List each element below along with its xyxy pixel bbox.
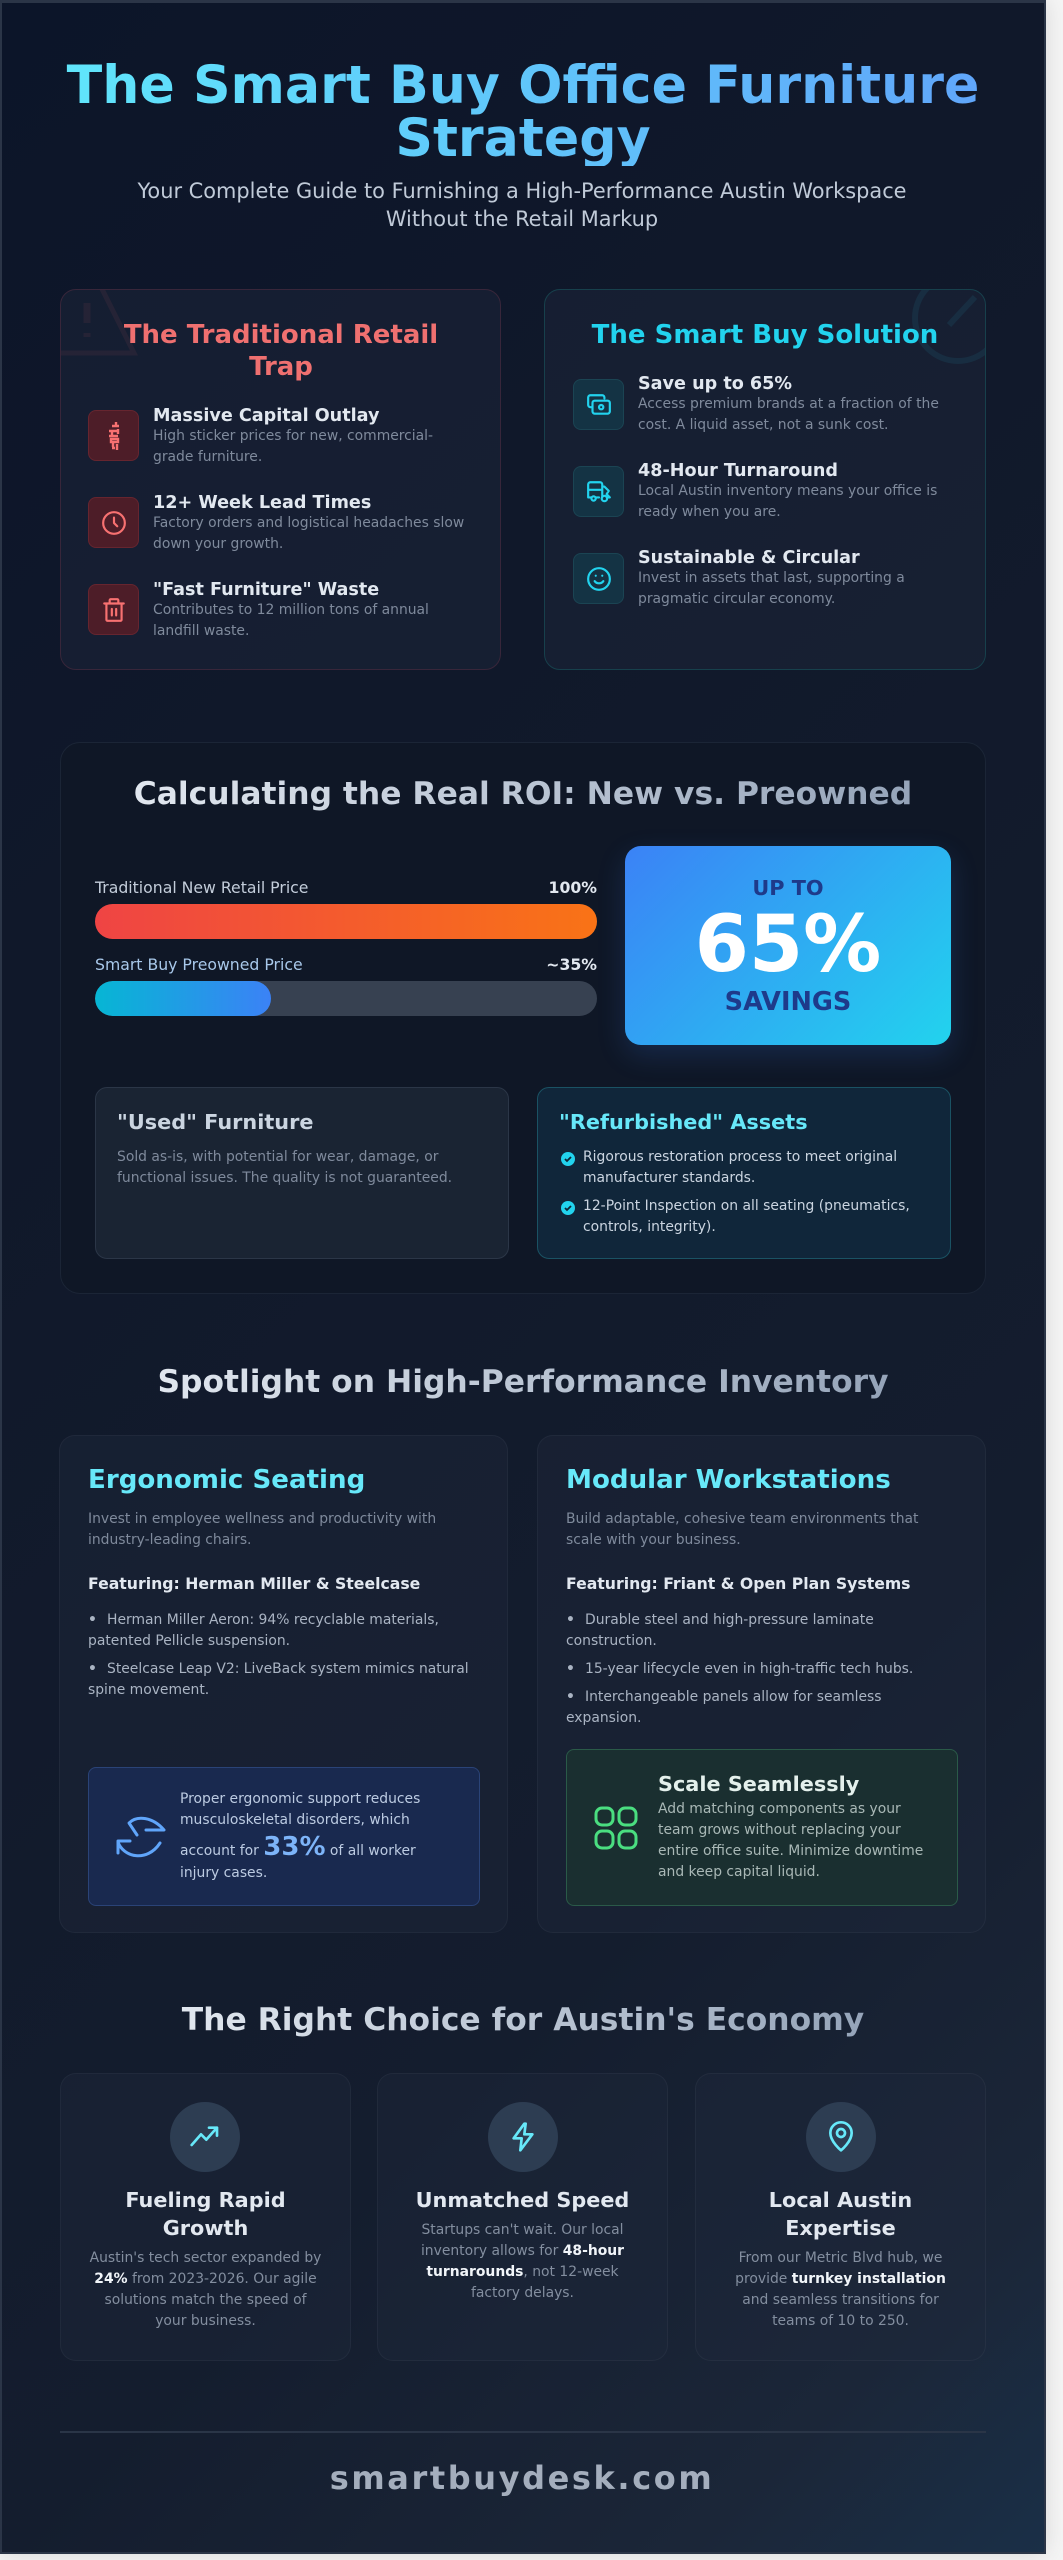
text: unmatched speed: turnarounds, not 12-week xyxy=(426,2264,619,2280)
text: statistic: injury cases. xyxy=(180,1865,267,1881)
text: massive capital outlay: High sticker prices for new, commercial- xyxy=(153,428,433,444)
icon: lightning bolt xyxy=(488,2102,558,2172)
text: intro: scale with your business. xyxy=(566,1532,741,1548)
text: unmatched speed: factory delays. xyxy=(471,2285,574,2301)
text: lead times: down your growth. xyxy=(153,536,283,552)
heading: traditional retail trap: The Traditional Retail xyxy=(124,320,438,350)
text: sustainable: Invest in assets that last, supporting a xyxy=(638,570,905,586)
footer: website: smartbuydesk.com xyxy=(330,2459,714,2497)
heading: fueling rapid growth: Growth xyxy=(163,2216,248,2240)
icon: clock xyxy=(88,497,139,548)
text: inspection: controls, integrity). xyxy=(583,1219,716,1235)
heading: ergonomic seating: Ergonomic Seating xyxy=(88,1465,365,1495)
text: intro xyxy=(88,1511,436,1548)
text: description xyxy=(658,1801,923,1880)
heading: unmatched speed: Unmatched Speed xyxy=(416,2188,629,2212)
icon: trending up xyxy=(170,2102,240,2172)
text: restoration: Rigorous restoration process to meet original xyxy=(583,1149,897,1165)
text: sustainable: Sustainable & Circular xyxy=(638,548,860,568)
panel: refurbished assets xyxy=(537,1087,951,1259)
text: fast furniture waste: Contributes to 12 million tons of annual xyxy=(153,602,429,618)
icon: check xyxy=(561,1152,575,1166)
text: unmatched speed: Startups can't wait. Our local xyxy=(421,2222,624,2238)
bar fill: preowned xyxy=(95,981,271,1016)
subtitle xyxy=(137,179,907,230)
heading: fueling rapid growth xyxy=(125,2188,286,2240)
callout: 33% xyxy=(88,1767,480,1906)
item: fast furniture waste xyxy=(88,580,429,639)
text: featuring: Featuring: Friant & Open Plan Systems xyxy=(566,1574,911,1593)
item: save xyxy=(573,374,939,433)
icon: grid xyxy=(594,1806,638,1850)
panel: local austin expertise xyxy=(695,2073,986,2361)
text: turnaround xyxy=(638,461,937,520)
panel: used furniture xyxy=(95,1087,509,1259)
text: unmatched speed xyxy=(421,2222,624,2301)
text: up to: UP TO xyxy=(752,876,824,900)
subtitle: Without the Retail Markup xyxy=(386,206,658,230)
icon: warning watermark xyxy=(61,290,138,356)
bullet: steel: • xyxy=(566,1612,575,1628)
heading: spotlight: Spotlight on High-Performance Inventory xyxy=(157,1364,889,1400)
heading: traditional retail trap: Trap xyxy=(249,352,313,382)
bullet: leap: Steelcase Leap V2: LiveBack system mimics natural xyxy=(107,1661,469,1677)
item: massive capital outlay xyxy=(88,406,433,465)
text: sustainable xyxy=(638,548,905,607)
bullet: panels: Interchangeable panels allow for seamless xyxy=(585,1689,882,1705)
panel: ROI xyxy=(60,742,986,1294)
icon: refresh arrows xyxy=(116,1816,166,1858)
text: intro: Invest in employee wellness and productivity with xyxy=(88,1511,436,1527)
title: The Smart Buy Office Furniture xyxy=(67,56,979,116)
icon: delivery truck xyxy=(573,466,624,517)
bar track: preowned xyxy=(95,981,597,1016)
icon: distorted cash glyph xyxy=(88,410,139,461)
bullet: aeron: • xyxy=(88,1612,97,1628)
text: fueling rapid growth: your business. xyxy=(155,2313,256,2329)
text: save: Save up to 65% xyxy=(638,374,792,394)
value: 35%: ~35% xyxy=(546,955,597,974)
text: statistic: musculoskeletal disorders, which xyxy=(180,1812,410,1828)
text: lead times xyxy=(153,493,464,552)
bar chart: price comparison xyxy=(94,878,597,1016)
text: fast furniture waste: "Fast Furniture" Waste xyxy=(153,580,379,600)
text: description: entire office suite. Minimize downtime xyxy=(658,1843,923,1859)
text: fueling rapid growth: solutions match the speed of xyxy=(104,2292,306,2308)
number: 65%: 65% xyxy=(695,900,881,990)
bullet: aeron: Herman Miller Aeron: 94% recyclable materials, xyxy=(107,1612,439,1628)
text: local austin expertise: teams of 10 to 250. xyxy=(772,2313,909,2329)
text: massive capital outlay xyxy=(153,406,433,465)
text: fueling rapid growth xyxy=(90,2250,321,2329)
text: local austin expertise: From our Metric Blvd hub, we xyxy=(739,2250,942,2266)
text: used: functional issues. The quality is not guaranteed. xyxy=(117,1170,452,1186)
text: used: Sold as-is, with potential for wear, damage, or xyxy=(117,1149,438,1165)
label: smart buy: Smart Buy Preowned Price xyxy=(95,955,303,974)
subtitle: Your Complete Guide to Furnishing a High-Performance Austin Workspace xyxy=(137,179,907,203)
item: lead times xyxy=(88,493,464,552)
text: massive capital outlay: Massive Capital Outlay xyxy=(153,406,379,426)
text: save xyxy=(638,374,939,433)
text: turnaround: ready when you are. xyxy=(638,504,781,520)
heading: local austin expertise xyxy=(696,2186,985,2242)
text: statistic xyxy=(180,1791,420,1881)
text: inspection xyxy=(583,1198,910,1235)
heading: refurbished: "Refurbished" Assets xyxy=(559,1110,808,1134)
item: turnaround xyxy=(573,461,937,520)
text: turnaround: Local Austin inventory means your office is xyxy=(638,483,937,499)
bullet: lifecycle: 15-year lifecycle even in high-traffic tech hubs. xyxy=(585,1661,913,1677)
text: fast furniture waste xyxy=(153,580,429,639)
text: description: team grows without replacing your xyxy=(658,1822,901,1838)
list: workstations xyxy=(566,1612,913,1726)
bullet: leap: spine movement. xyxy=(88,1682,209,1698)
text: lead times: 12+ Week Lead Times xyxy=(153,493,371,513)
panel: traditional retail trap xyxy=(60,289,501,670)
bullet: steel: construction. xyxy=(566,1633,657,1649)
text: restoration: manufacturer standards. xyxy=(583,1170,755,1186)
text: used xyxy=(117,1149,452,1186)
heading: traditional retail trap xyxy=(124,320,438,382)
heading: local austin expertise: Expertise xyxy=(785,2216,896,2240)
text: intro xyxy=(566,1511,918,1548)
bullet: lifecycle: • xyxy=(566,1661,575,1677)
bullet: aeron: patented Pellicle suspension. xyxy=(88,1633,290,1649)
bullet: steel xyxy=(566,1612,874,1649)
bar: new retail xyxy=(95,904,597,939)
panel: ergonomic seating xyxy=(59,1435,508,1933)
title xyxy=(56,60,990,166)
bullet: steel: Durable steel and high-pressure laminate xyxy=(585,1612,874,1628)
text: unmatched speed: inventory allows for 48-hour xyxy=(421,2243,624,2259)
text: turnaround: 48-Hour Turnaround xyxy=(638,461,838,481)
text: save: cost. A liquid asset, not a sunk cost. xyxy=(638,417,888,433)
text: intro: Build adaptable, cohesive team environments that xyxy=(566,1511,918,1527)
panel: modular workstations xyxy=(537,1435,986,1933)
text: fueling rapid growth: 24% from 2023-2026. Our agile xyxy=(94,2271,317,2287)
text: savings: SAVINGS xyxy=(725,987,851,1017)
text: description: and keep capital liquid. xyxy=(658,1864,820,1880)
bullet: restoration xyxy=(561,1149,897,1186)
text: local austin expertise xyxy=(696,2248,985,2332)
text: local austin expertise: and seamless transitions for xyxy=(742,2292,939,2308)
bullet: aeron xyxy=(88,1612,439,1649)
icon: check xyxy=(561,1201,575,1215)
text: massive capital outlay: grade furniture. xyxy=(153,449,262,465)
text: fueling rapid growth: Austin's tech sector expanded by xyxy=(90,2250,321,2266)
bullet: panels xyxy=(566,1689,882,1726)
text: featuring: Featuring: Herman Miller & Steelcase xyxy=(88,1574,420,1593)
bullet: panels: • xyxy=(566,1689,575,1705)
item: sustainable xyxy=(573,548,905,607)
text: statistic: account for 33% of all worker xyxy=(180,1832,416,1862)
icon: map pin xyxy=(806,2102,876,2172)
text: sustainable: pragmatic circular economy. xyxy=(638,591,835,607)
panel: fueling rapid growth xyxy=(60,2073,351,2361)
text: fast furniture waste: landfill waste. xyxy=(153,623,249,639)
value: 100%: 100% xyxy=(549,878,597,897)
bullet: inspection xyxy=(561,1198,910,1235)
panel: smart buy solution xyxy=(544,289,986,670)
text: description: Add matching components as your xyxy=(658,1801,901,1817)
heading: smart buy solution: The Smart Buy Solution xyxy=(592,320,938,350)
bullet: panels: expansion. xyxy=(566,1710,641,1726)
panel: unmatched speed xyxy=(377,2073,668,2361)
icon: trash xyxy=(88,584,139,635)
heading: local austin expertise: Local Austin xyxy=(769,2188,912,2212)
bullet: leap: • xyxy=(88,1661,97,1677)
text: restoration xyxy=(583,1149,897,1186)
title: Strategy xyxy=(395,109,651,169)
heading: right choice: The Right Choice for Austin's Economy xyxy=(182,2002,864,2038)
heading: fueling rapid growth: Fueling Rapid xyxy=(125,2188,286,2212)
text: save: Access premium brands at a fraction of the xyxy=(638,396,939,412)
text: scale seamlessly: Scale Seamlessly xyxy=(658,1772,859,1796)
icon: smile xyxy=(573,553,624,604)
icon: cash xyxy=(573,379,624,430)
icon: check watermark xyxy=(912,290,985,364)
text: inspection: 12-Point Inspection on all seating (pneumatics, xyxy=(583,1198,910,1214)
heading: used: "Used" Furniture xyxy=(117,1110,313,1134)
text: lead times: Factory orders and logistical headaches slow xyxy=(153,515,464,531)
text: local austin expertise: provide turnkey installation xyxy=(735,2271,946,2287)
text: statistic: Proper ergonomic support reduces xyxy=(180,1791,420,1807)
text: intro: industry-leading chairs. xyxy=(88,1532,251,1548)
heading: ROI: Calculating the Real ROI: New vs. Preowned xyxy=(134,776,912,812)
list: seating xyxy=(88,1612,469,1698)
callout: scale seamlessly xyxy=(566,1749,958,1906)
label: traditional: Traditional New Retail Price xyxy=(95,878,308,897)
bullet: leap xyxy=(88,1661,469,1698)
callout: 65% savings xyxy=(625,846,951,1045)
heading: modular workstations: Modular Workstations xyxy=(566,1465,891,1495)
